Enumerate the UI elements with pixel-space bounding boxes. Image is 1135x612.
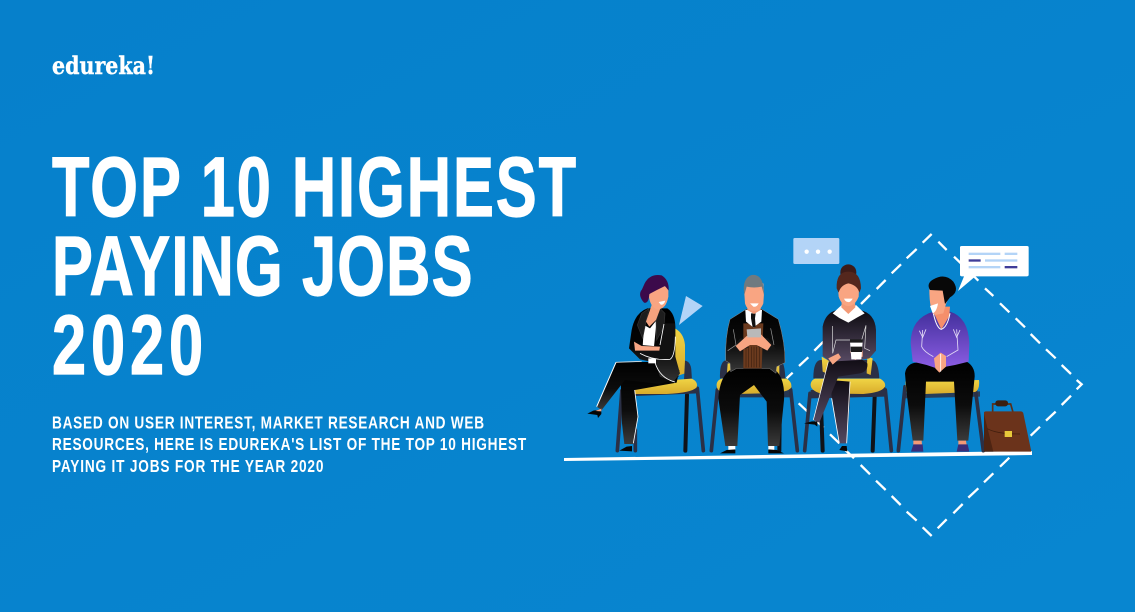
logo: edureka!: edureka! [52, 51, 155, 80]
description text: BASED ON USER INTEREST, MARKET RESEARCH AND WEB [52, 414, 484, 433]
chair 4 [898, 380, 983, 451]
triangle speech bubble [679, 296, 703, 325]
title: 2020 [52, 297, 203, 392]
man with phone [718, 275, 785, 453]
chair 3 [805, 357, 891, 451]
dashed diamond [787, 234, 1082, 536]
chair 2 [711, 360, 797, 451]
chair 1 [617, 328, 703, 451]
floor line [564, 451, 1032, 461]
title [52, 139, 576, 392]
description text [52, 414, 527, 476]
description text: RESOURCES, HERE IS EDUREKA'S LIST OF THE TOP 10 HIGHEST [52, 436, 527, 454]
title: TOP 10 HIGHEST [52, 139, 576, 234]
man in purple sweater [905, 276, 975, 452]
text speech bubble [958, 246, 1029, 291]
briefcase [984, 400, 1031, 452]
illustration left: two seated people [587, 275, 797, 453]
description text: PAYING IT JOBS FOR THE YEAR 2020 [52, 458, 324, 476]
woman with coffee cup [804, 264, 876, 451]
title: PAYING JOBS [52, 218, 472, 313]
typing speech bubble [793, 238, 839, 264]
illustration right: two seated people, bag, bubbles [793, 238, 1031, 452]
woman with crossed arms [587, 275, 680, 451]
